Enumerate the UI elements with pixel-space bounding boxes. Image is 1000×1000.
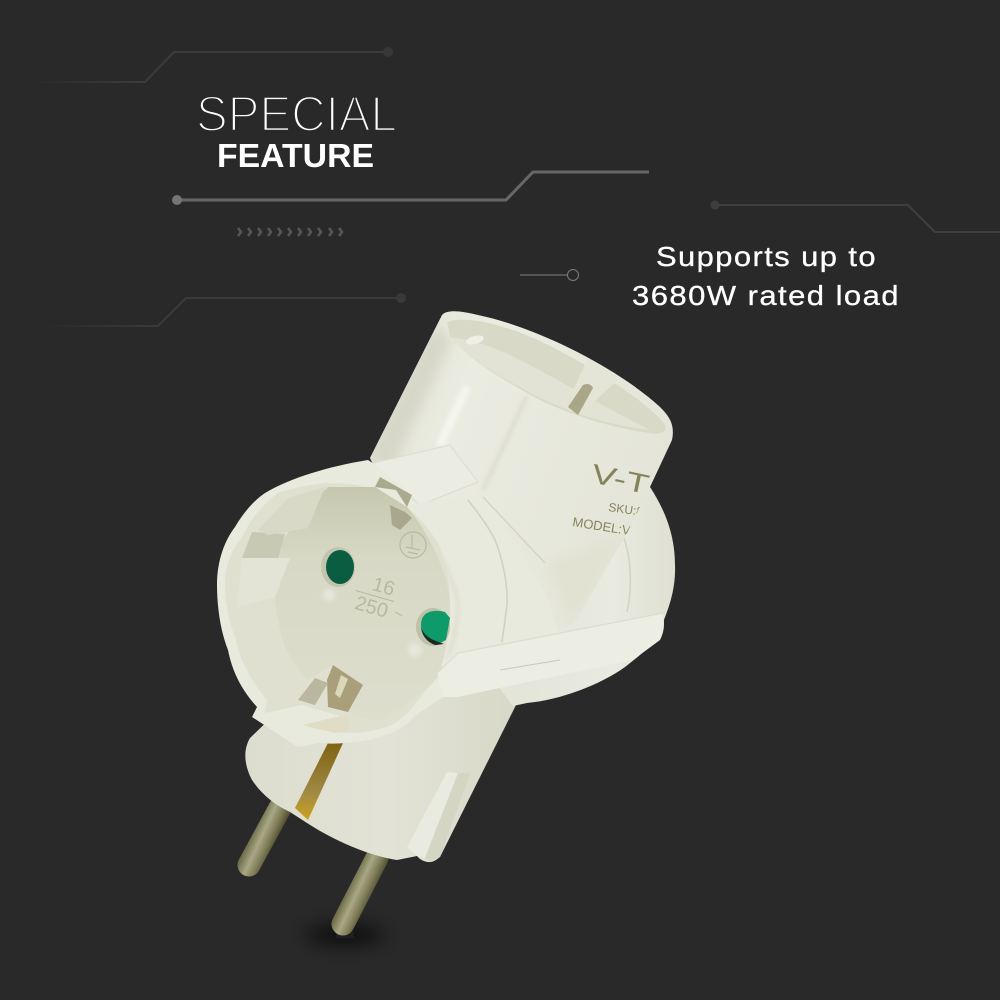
product: three-way schuko adapter [217, 311, 675, 942]
shoulder block [373, 445, 478, 505]
top ground clip [390, 505, 412, 530]
rim ground contact [568, 384, 593, 415]
title: SPECIAL [196, 86, 397, 142]
circuit line: under heading [172, 172, 649, 205]
top socket cylinder [366, 311, 673, 640]
wall key: lower [237, 558, 290, 607]
cylinder rim opening [447, 320, 666, 434]
moulded rating: 250 [352, 592, 390, 623]
title [196, 86, 397, 174]
socket interior wall [225, 483, 450, 733]
connector marker [520, 270, 578, 280]
socket floor [275, 487, 450, 720]
front socket shell [217, 460, 560, 747]
floor shadow [305, 928, 385, 942]
circuit line: lower left [40, 293, 406, 326]
rim key [570, 358, 620, 403]
feature text: Supports up to [656, 241, 877, 272]
rim nub [465, 334, 485, 346]
brand label: SKU:8 [608, 500, 644, 519]
collar crease [468, 500, 507, 642]
lower ground clip [298, 665, 363, 733]
brand label [573, 464, 650, 534]
rim notch gap [375, 477, 412, 507]
title: FEATURE [217, 137, 374, 174]
plug pin: left [249, 808, 280, 865]
circuit line: top left [30, 47, 393, 82]
green shutter hole: lower [408, 608, 450, 657]
circuit line: right [710, 200, 1000, 232]
cylinder step crease [483, 396, 527, 490]
cylinder collar crease [483, 497, 545, 563]
wall key: upper [258, 487, 325, 535]
moulded rating [349, 569, 412, 627]
lobe crease [623, 535, 630, 612]
feature text: 3680W rated load [632, 280, 900, 311]
rim far wall shade [452, 338, 650, 430]
chevron row [238, 228, 342, 236]
brand label: V-T [589, 459, 652, 500]
moulded rating: ~ [392, 605, 405, 624]
plug body [245, 660, 530, 862]
ground symbol [400, 532, 426, 558]
brand label: MODEL:VT [572, 514, 640, 539]
plug body ridge [407, 772, 470, 862]
gold contact strip [295, 743, 343, 820]
green shutter hole: upper [321, 547, 355, 601]
side tab [437, 613, 664, 697]
feature text [632, 241, 900, 311]
back socket lobe [470, 480, 675, 706]
cylinder shading [366, 325, 627, 625]
collar inner shade [430, 540, 458, 657]
plug pin: right [343, 858, 377, 924]
moulded rating: 16 [370, 573, 397, 601]
wall recess [242, 532, 285, 558]
